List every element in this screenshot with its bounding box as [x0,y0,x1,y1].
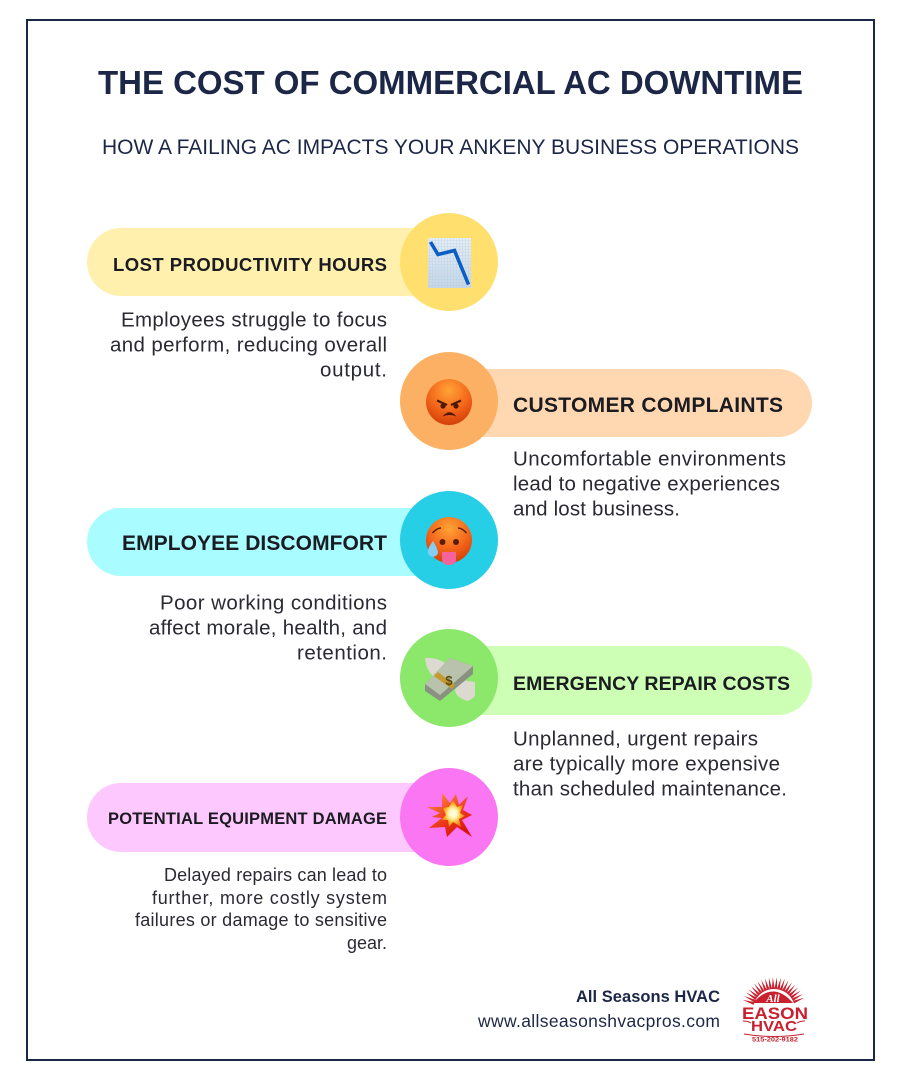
item: customer complaints [400,352,812,520]
description: are typically more expensive [513,752,780,776]
logo: All Season HVAC: 515-202-9182 [752,1038,799,1044]
label pill: lost productivity hours: LOST PRODUCTIVITY HOURS [113,254,387,275]
logo: All Season HVAC: All [765,993,781,1005]
label pill: potential equipment damage [87,783,447,852]
description: retention. [297,642,387,664]
description: Poor working conditions [160,592,387,614]
label pill: emergency repair costs: EMERGENCY REPAIR COSTS [513,673,790,695]
description: Employees struggle to focus [121,308,387,332]
icon: falling chart [400,213,498,311]
description: Unplanned, urgent repairs [513,728,758,750]
description: and lost business. [513,498,680,520]
logo: All Season HVAC [742,977,808,1044]
description [513,448,786,520]
description [149,592,387,664]
icon: angry face [400,352,498,450]
description: gear. [347,933,387,953]
item: employee discomfort [87,491,498,664]
title: THE COST OF COMMERCIAL AC DOWNTIME [98,64,803,101]
description: further, more costly system [152,888,387,908]
description [513,728,787,800]
item: potential equipment damage [87,768,498,953]
logo: All Season HVAC: HVAC [751,1018,797,1035]
label pill: potential equipment damage: POTENTIAL EQUIPMENT DAMAGE [108,810,387,828]
description [110,308,387,382]
description: than scheduled maintenance. [513,778,787,800]
icon: money with wings: $ [445,673,453,688]
label pill: customer complaints: CUSTOMER COMPLAINTS [513,394,783,417]
description: affect morale, health, and [149,616,387,640]
description: output. [320,358,387,382]
label pill: customer complaints [452,369,812,437]
description: and perform, reducing overall [110,334,387,356]
label pill: employee discomfort [87,508,447,576]
description [135,865,387,953]
icon: explosion [400,768,498,866]
icon: money with wings [400,629,498,727]
item: lost productivity hours [87,213,498,382]
label pill: employee discomfort: EMPLOYEE DISCOMFORT [122,532,387,555]
description: lead to negative experiences [513,472,780,496]
logo: All Season HVAC: EASON [742,1004,808,1023]
description: Delayed repairs can lead to [164,865,387,885]
description: Uncomfortable environments [513,448,786,470]
icon: hot face [400,491,498,589]
description: failures or damage to sensitive [135,910,387,930]
label pill: lost productivity hours [87,228,447,296]
footer: website: www.allseasonshvacpros.com [477,1011,720,1031]
item: emergency repair costs [400,629,812,800]
footer: company name: All Seasons HVAC [576,988,720,1006]
label pill: emergency repair costs [452,646,812,715]
subtitle: HOW A FAILING AC IMPACTS YOUR ANKENY BUSINESS OPERATIONS [102,136,799,159]
